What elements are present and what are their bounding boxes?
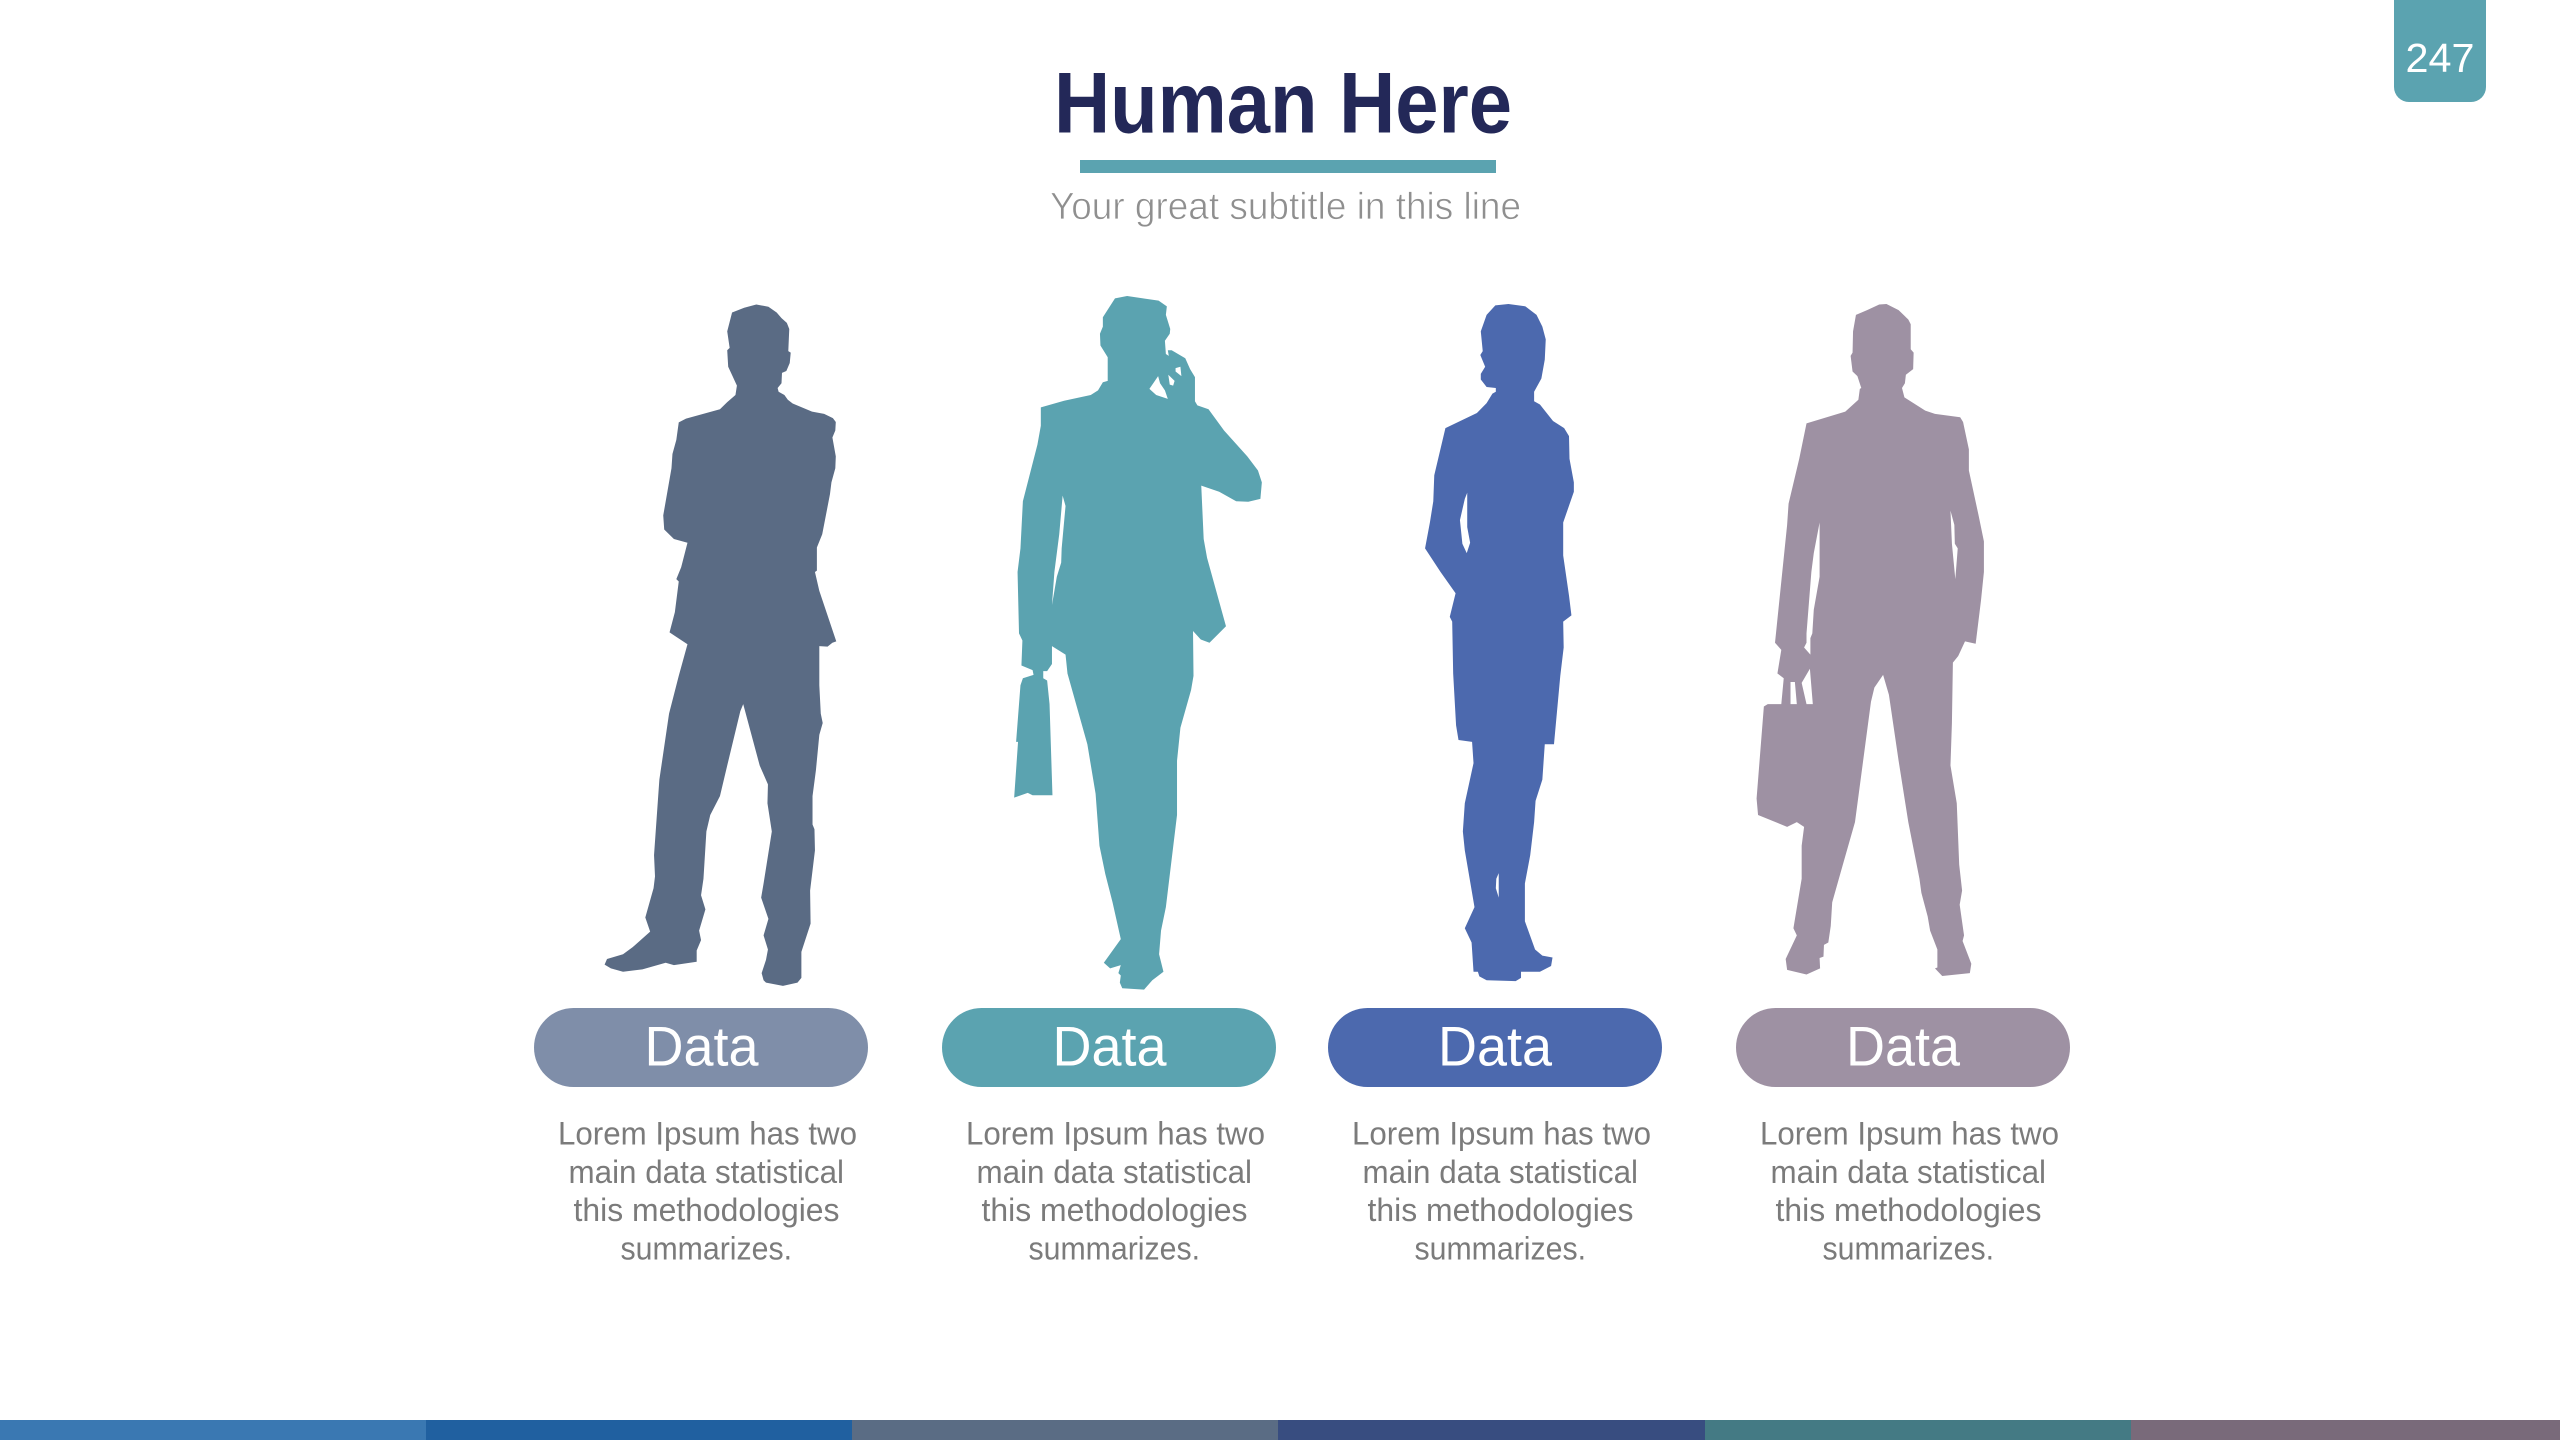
pill label: Data — [1438, 1014, 1553, 1078]
description text: main data statistical — [1770, 1154, 2046, 1190]
description text: this methodologies — [574, 1192, 840, 1228]
description text: main data statistical — [1362, 1154, 1638, 1190]
pill label: Data — [1052, 1014, 1167, 1078]
pill label — [942, 1008, 1276, 1087]
description text: Lorem Ipsum has two — [558, 1116, 857, 1152]
description text: this methodologies — [1776, 1192, 2042, 1228]
description text: summarizes. — [620, 1230, 792, 1266]
description text — [1352, 1116, 1651, 1266]
silhouette: man with tote bag — [1757, 304, 1984, 976]
description text: this methodologies — [1368, 1192, 1634, 1228]
panel: person 1 — [534, 304, 868, 1266]
title: Human Here — [1054, 56, 1512, 152]
subtitle: Your great subtitle in this line — [1050, 186, 1521, 228]
title underline bar — [1080, 160, 1496, 173]
description text: Lorem Ipsum has two — [966, 1116, 1265, 1152]
description text: this methodologies — [982, 1192, 1248, 1228]
pill label — [534, 1008, 868, 1087]
description text: summarizes. — [1822, 1230, 1994, 1266]
pill label — [1328, 1008, 1662, 1087]
description text — [558, 1116, 857, 1266]
description text — [1760, 1116, 2059, 1266]
page number tab — [2394, 0, 2486, 102]
silhouette: man with arms crossed — [605, 304, 836, 986]
panel: person 2 — [942, 296, 1276, 1267]
description text — [966, 1116, 1265, 1266]
pill label: Data — [644, 1014, 759, 1078]
panel: person 4 — [1736, 304, 2070, 1266]
description text: main data statistical — [976, 1154, 1252, 1190]
pill label: Data — [1846, 1014, 1961, 1078]
silhouette: woman in skirt suit — [1425, 304, 1574, 981]
silhouette: man on phone with bag — [1014, 296, 1262, 990]
bottom colour strip — [0, 1420, 2560, 1440]
description text: Lorem Ipsum has two — [1760, 1116, 2059, 1152]
description text: Lorem Ipsum has two — [1352, 1116, 1651, 1152]
description text: summarizes. — [1414, 1230, 1586, 1266]
description text: main data statistical — [568, 1154, 844, 1190]
panel: person 3 — [1328, 304, 1662, 1266]
pill label — [1736, 1008, 2070, 1087]
page number tab: 247 — [2406, 35, 2474, 81]
description text: summarizes. — [1028, 1230, 1200, 1266]
